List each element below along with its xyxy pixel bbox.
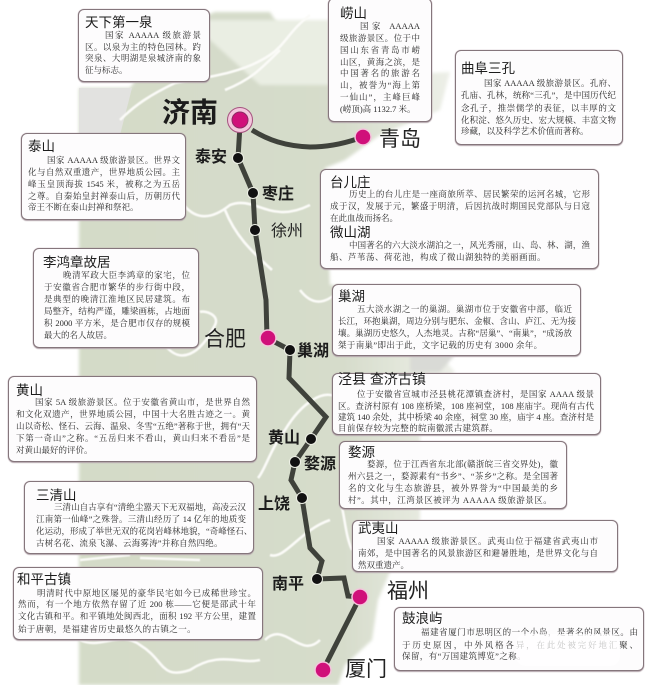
heading: 泾县 查济古镇 [338,371,426,387]
heading: 黄山 [16,383,43,398]
text block: 最大的名人故居。 [44,330,112,340]
text block: 南郊，是中国著名的风景旅游区和避暑胜地，是世界文化与自 [358,548,598,558]
text block: 始于唐朝，是福建省历史最悠久的古镇之一。 [18,624,196,634]
panel: Wuyi Mountain [352,520,618,572]
panel: Chaohu Lake [332,284,581,356]
panel: Chaji ancient town, Jing County [332,373,601,435]
panel: Qufu Three Confucian Sites [455,50,623,145]
text block: 化运动，形成了举世无双的花岗岩峰林地貌，“奇峰怪石、 [36,526,252,536]
stop: Xiamen [315,662,331,678]
text block: Tai'erzhuang and Weishan Lake: 中国著名的六大淡水湖泊之一，风光秀丽，山、岛、林、湖，渔 [349,240,590,250]
text block: 国家 AAAAA [360,21,420,31]
panel: Tai'erzhuang and Weishan Lake [320,169,599,269]
stop: Jinan [228,108,252,132]
text block: 国家 AAAAA 级旅游景区。孔府、 [484,78,616,88]
route: main line Jinan to Xiamen [238,125,360,670]
text block: Tai'erzhuang and Weishan Lake: 历史上的台儿庄是一座商旅所萃、居民繁荣的运河名城，它形 [349,189,590,199]
text block [16,397,250,455]
text block: 级旅游景区。位于中 [340,33,420,43]
city labels: 南平 [272,575,304,593]
text block: 文化古镇和平。和平镇地处闽西北，面积 192 平方公里，建置 [18,611,256,621]
text block: 念孔子，推崇儒学的表征，以丰厚的文 [461,103,616,113]
text block: 征与标志。 [85,65,128,75]
text block: 突泉、大明湖是泉城济南的象 [85,53,201,63]
text block [348,459,558,505]
intermediate stops [232,152,322,584]
text block: 国山东省青岛市崂 [340,45,420,55]
text block: 区。以泉为主的特色园林。趵 [85,42,201,52]
text block: 三清山自古享有“清绝尘嚣天下无双福地，高凌云汉 [54,502,246,512]
text block: 村”。其中，江湾景区被评为 AAAAA 级旅游景区。 [348,495,552,505]
text block: 一仙山”，主峰巨峰 [340,92,420,102]
heading: 李鸿章故居 [43,255,110,270]
text block: Tai'erzhuang and Weishan Lake: 在此血战而扬名。 [330,213,398,223]
text block: 江南第一仙峰”之殊誉。三清山经历了 14 亿年的地质变 [36,514,246,524]
heading: 崂山 [340,6,367,21]
city labels: 合肥 [204,328,246,351]
text block: 福建省厦门市思明区的一个小岛，是著名的风景区。由 [421,627,638,637]
map: white province borders and rivers [80,15,352,673]
text block: 于历史原因，中外风格各异，在此处被完好地汇聚、 [402,640,638,650]
city labels: 厦门 [345,658,387,681]
text block [85,30,201,75]
text block: 古树名花、流泉飞瀑、云海雾涛”并称自然四绝。 [36,538,223,548]
text block: 保留，有“万国建筑博览”之称。 [402,651,526,661]
text block: 山以奇松、怪石、云海、温泉、冬雪“五绝”著称于世，拥有“天 [16,421,250,431]
text block: 国家 AAAAA 级旅游景 [105,30,201,40]
text block: 国家 AAAAA 级旅游景区。武夷山位于福建省武夷山市 [377,536,598,546]
text block: 山，被誉为“海上第 [340,80,420,90]
text block: 下第一奇山”之称。“五岳归来不看山，黄山归来不看岳”是 [16,433,250,443]
city labels: 徐州 [271,222,303,240]
city labels: 福州 [387,580,429,603]
text block: 之尊。自秦始皇封禅泰山后，历朝历代 [28,191,180,201]
text block [44,270,190,340]
text block: 孔庙、孔林，统称“三孔”，是中国历代纪 [461,90,616,100]
watermark smudge [516,634,620,666]
text block [358,536,598,570]
panel: Heping ancient town [13,567,263,640]
heading: 武夷山 [358,521,398,536]
heading: Tai'erzhuang: 台儿庄 [330,175,370,190]
panel: Sanqing Mountain [24,481,254,554]
text block [28,155,180,212]
text block: 对黄山最好的评价。 [16,445,93,455]
text block: 化积淀、悠久历史、宏大规模、丰富文物 [461,115,616,125]
city labels: 巢湖 [297,342,329,360]
panel: Laoshan [328,0,432,122]
city labels: 黄山 [268,429,300,447]
text block: 区。查济村原有 108 座桥梁，108 座祠堂，108 座庙宇。现尚有古代 [338,401,594,411]
heading: 巢湖 [338,289,365,304]
text block: 帝王不断在泰山封禅和祭祀。 [28,202,139,212]
text block: Tai'erzhuang and Weishan Lake: 成于汉，发展于元，繁盛于明清，后因抗战时期国民党部队与日寇 [330,201,590,211]
panel: Mount Tai [21,133,186,220]
city labels: 青岛 [379,128,421,151]
text block [340,21,420,114]
panel: Baotu Spring [78,9,210,82]
panel: Gulangyu [394,607,644,671]
text block: 于安徽省合肥市繁华的步行街中段， [44,282,190,292]
text block: 位于安徽省宣城市泾县桃花潭镇查济村，是国家 AAAA 级景 [357,389,594,399]
text block: Tai'erzhuang and Weishan Lake: 船、芦苇荡、荷花池，构成了微山湖独特的美丽画面。 [330,252,546,262]
heading: 和平古镇 [17,572,71,587]
text block: 长江，环抱巢湖，周边分别与肥东、金椒、含山、庐江、无为接 [338,316,576,326]
panel: Li Hongzhang's former residence [33,248,199,348]
text block [338,304,576,350]
text block: 五大淡水湖之一的巢湖。巢湖市位于安徽省中部，临近 [357,304,572,314]
text block [36,502,252,548]
panel: Huangshan [8,376,257,462]
panel: Wuyuan [339,441,567,509]
text block [18,588,256,634]
text block: 婺源，位于江西省东北部(赣浙皖三省交界处)，徽 [367,459,558,469]
map: land area [79,12,455,685]
text block: Tai'erzhuang and Weishan Lake: 微山湖 [330,225,370,240]
text block: 国家 AAAAA 级旅游景区。世界文 [47,155,180,165]
text block: 然而，有一个地方依然存留了近 200 栋——它便是邵武十年 [18,599,256,609]
text block: 壤。巢湖历史悠久，人杰地灵。古称“居巢”、“南巢”，“成汤放 [338,328,572,338]
heading: 泰山 [28,139,55,154]
city labels: 泰安 [195,147,227,166]
heading: 天下第一泉 [85,15,152,30]
route: Jinan to Qingdao branch [252,130,357,147]
heading: 婺源 [348,445,375,460]
text block: 积 2000 平方米，是合肥市仅存的规模 [44,318,190,328]
text block: 局整齐，结构严谨，雕梁画栋，占地面 [44,306,190,316]
city labels: 枣庄 [262,184,294,203]
stop: Fuzhou [352,589,368,605]
city labels [162,97,429,681]
text block [461,78,616,136]
text block: 晚清军政大臣李鸿章的家宅，位 [63,270,190,280]
text block: 明清时代中原地区屡见的豪华民宅如今已成稀世珍宝。 [37,588,256,598]
city labels: 济南 [162,97,218,128]
text block: 中国著名的旅游名 [340,68,420,78]
text block: Tai'erzhuang and Weishan Lake [330,189,590,262]
text block: (崂顶)高 1132.7 米。 [340,104,415,114]
text block: 国家 5A 级旅游景区。位于安徽省黄山市，是世界自然 [35,397,250,407]
text block: 化与自然双重遗产，世界地质公园。主 [28,167,180,177]
heading: 曲阜三孔 [461,61,515,76]
city labels: 婺源 [304,455,336,473]
text block [338,389,594,433]
text block [402,627,638,661]
text block: 州六县之一，婺源素有“书乡”、“茶乡”之称。是全国著 [348,471,558,481]
stop: Hefei [260,330,276,346]
text block: 是典型的晚清江淮地区民居建筑。布 [44,294,190,304]
text block: 桀于南巢”即出于此，文字记载的历史有 3000 余年。 [338,340,542,350]
text block: 峰玉皇顶海拔 1545 米，被称之为五岳 [28,179,180,189]
heading: 鼓浪屿 [402,611,442,626]
text block: 山区，黄海之滨，是 [340,57,420,67]
text block: 名的文化与生态旅游县，被外界誉为“中国最美的乡 [348,483,558,493]
heading: 三清山 [36,488,76,503]
text block: 然双重遗产。 [358,560,409,570]
stop: Qingdao [355,129,371,145]
city labels: 上饶 [258,495,290,513]
text block: 珍藏，以及科学艺术价值而著称。 [461,126,589,136]
text block: 目前保存较为完整的皖南徽派古建筑群。 [338,423,498,433]
text block: 建筑 140 余处，其中桥梁 40 余座，祠堂 30 座，庙宇 4 座。查济村是 [338,412,594,422]
text block: 和文化双遗产，世界地质公园，中国十大名胜古迹之一。黄 [16,409,250,419]
